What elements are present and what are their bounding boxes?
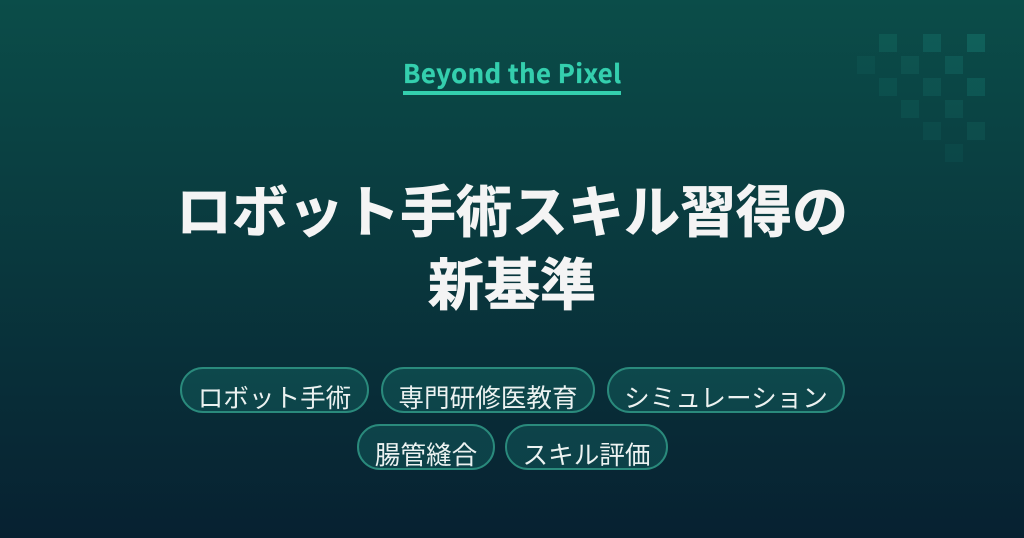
tag: 専門研修医教育: 専門研修医教育: [398, 378, 578, 415]
tag: スキル評価: スキル評価: [522, 435, 650, 472]
tag: スキル評価: [505, 424, 668, 470]
tag: 腸管縫合: 腸管縫合: [375, 435, 477, 472]
tag: シミュレーション: [607, 367, 845, 413]
tag: シミュレーション: シミュレーション: [624, 378, 828, 415]
title: 新基準: [428, 241, 596, 322]
tag: 腸管縫合: [357, 424, 495, 470]
title: ロボット手術スキル習得の: [176, 168, 848, 249]
decorative pixel grid: [879, 34, 985, 140]
brand label: Beyond the Pixel: Beyond the Pixel: [403, 54, 622, 91]
tag: ロボット手術: ロボット手術: [198, 378, 351, 415]
title: [176, 168, 848, 322]
tag: ロボット手術: [180, 367, 369, 413]
tag: 専門研修医教育: [381, 367, 595, 413]
